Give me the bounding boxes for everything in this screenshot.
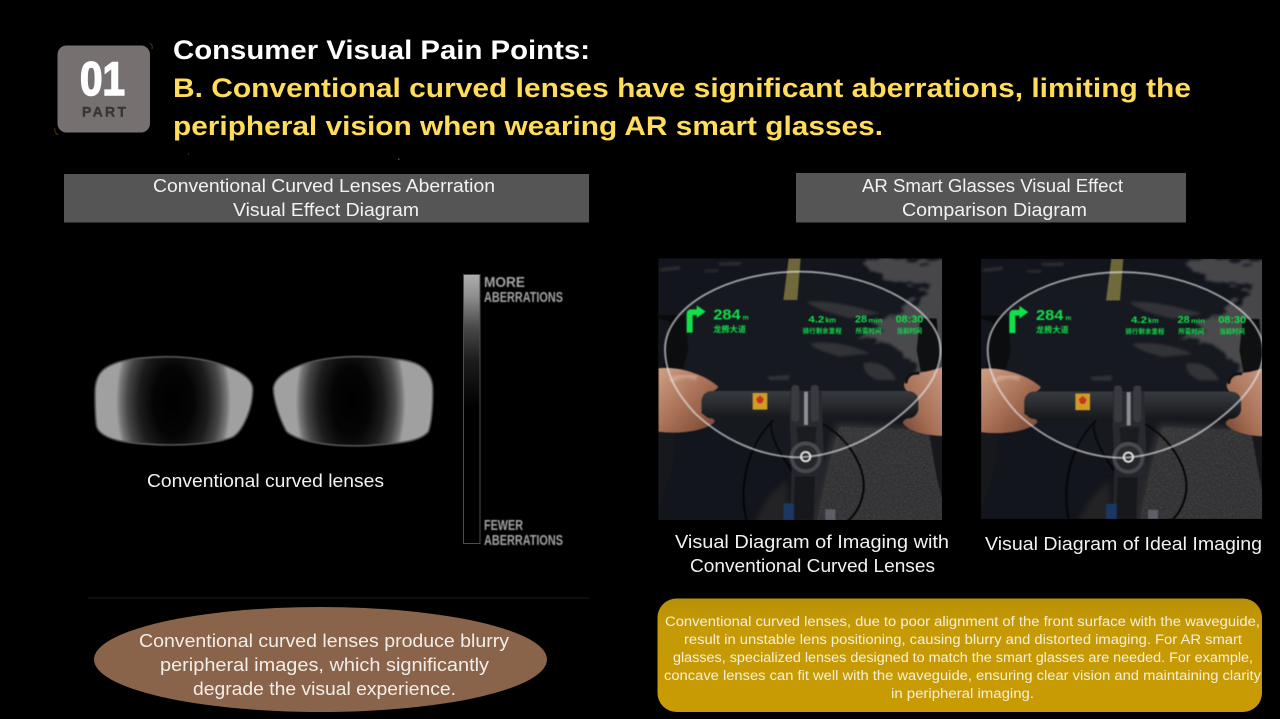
caption: conventional curved lenses: Conventional curved lenses	[147, 471, 384, 491]
scale labels	[484, 274, 563, 549]
HUD readout: 08:30	[896, 314, 923, 325]
HUD readout	[1036, 308, 1246, 335]
callout: specialized lenses explanation: Conventional curved lenses, due to poor alignment of the front surface with the waveguide,	[665, 614, 1260, 629]
panel heading: aberration diagram: Visual Effect Diagram	[233, 200, 419, 220]
HUD readout: 28	[1178, 315, 1190, 326]
HUD readout: m	[743, 314, 749, 321]
badge: 01 PART	[55, 43, 152, 135]
heading: consumer visual pain points: Consumer Visual Pain Points:	[173, 35, 590, 65]
callout: specialized lenses explanation	[658, 598, 1262, 712]
callout: specialized lenses explanation: result in unstable lens positioning, causing blurry and distorted imaging. For AR smart	[684, 632, 1242, 647]
HUD readout: 所需时间	[1178, 326, 1204, 335]
panel heading: aberration diagram: Conventional Curved Lenses Aberration	[153, 176, 495, 196]
HUD readout: min	[1191, 318, 1205, 325]
HUD readout: 当前时间	[897, 326, 922, 335]
callout: specialized lenses explanation: in peripheral imaging.	[891, 686, 1034, 701]
HUD readout: m	[1065, 315, 1071, 322]
badge: 01 PART: PART	[82, 104, 126, 120]
left lens	[95, 357, 253, 445]
legend: aberration scale	[464, 274, 563, 549]
HUD readout: 骑行剩余里程	[1125, 326, 1165, 335]
callout: blurry peripheral images: degrade the visual experience.	[193, 679, 456, 699]
scale labels: MORE	[484, 274, 525, 291]
caption: ideal imaging: Visual Diagram of Ideal Imaging	[985, 534, 1262, 554]
scale labels: ABERRATIONS	[484, 289, 563, 306]
image: imaging with conventional curved lenses	[658, 258, 942, 520]
lens diagram: conventional curved lenses	[95, 357, 433, 446]
callout: blurry peripheral images	[94, 607, 547, 712]
heading: conventional lenses statement: B. Conventional curved lenses have significant aberrations, limiting the	[173, 73, 1191, 103]
badge: 01 PART: 01	[80, 52, 125, 105]
HUD readout: 龙腾大道	[1036, 324, 1069, 334]
callout: specialized lenses explanation: glasses, specialized lenses designed to match the smart glasses are needed. For example,	[673, 650, 1253, 665]
HUD readout: 骑行剩余里程	[803, 326, 842, 335]
image: ideal imaging	[981, 258, 1262, 519]
scale labels: ABERRATIONS	[484, 532, 563, 549]
panel heading: comparison diagram: AR Smart Glasses Visual Effect	[862, 176, 1123, 196]
callout: specialized lenses explanation: concave lenses can fit well with the waveguide, ensuring clear vision and maintaining clarity	[664, 668, 1261, 683]
caption: conventional imaging: Visual Diagram of Imaging with	[675, 532, 949, 552]
HUD readout: 4.2	[1131, 315, 1147, 325]
caption: conventional imaging	[675, 532, 949, 576]
HUD readout: 4.2	[808, 314, 824, 324]
title	[173, 35, 1191, 141]
panel heading: comparison diagram: Comparison Diagram	[902, 200, 1087, 220]
callout: blurry peripheral images: peripheral images, which significantly	[160, 655, 489, 675]
HUD readout	[713, 307, 923, 335]
right lens	[273, 357, 433, 446]
HUD readout: 所需时间	[856, 326, 881, 335]
HUD readout: 龙腾大道	[713, 324, 746, 334]
HUD readout: 284	[713, 307, 742, 323]
scale bar	[464, 274, 480, 544]
panel heading: aberration diagram	[64, 174, 589, 222]
HUD readout: km	[825, 317, 836, 324]
scale labels: FEWER	[484, 517, 523, 534]
caption: conventional imaging: Conventional Curved Lenses	[690, 556, 935, 576]
callout: blurry peripheral images: Conventional curved lenses produce blurry	[139, 631, 509, 651]
heading: conventional lenses statement	[173, 73, 1191, 141]
HUD readout: min	[868, 317, 882, 324]
HUD readout: 28	[855, 314, 868, 325]
HUD readout: 08:30	[1218, 315, 1246, 326]
HUD readout: 当前时间	[1219, 326, 1245, 335]
panel heading: comparison diagram	[796, 173, 1186, 222]
HUD readout: 284	[1036, 308, 1064, 324]
heading: conventional lenses statement: peripheral vision when wearing AR smart glasses.	[173, 111, 883, 141]
HUD readout: km	[1148, 318, 1159, 325]
